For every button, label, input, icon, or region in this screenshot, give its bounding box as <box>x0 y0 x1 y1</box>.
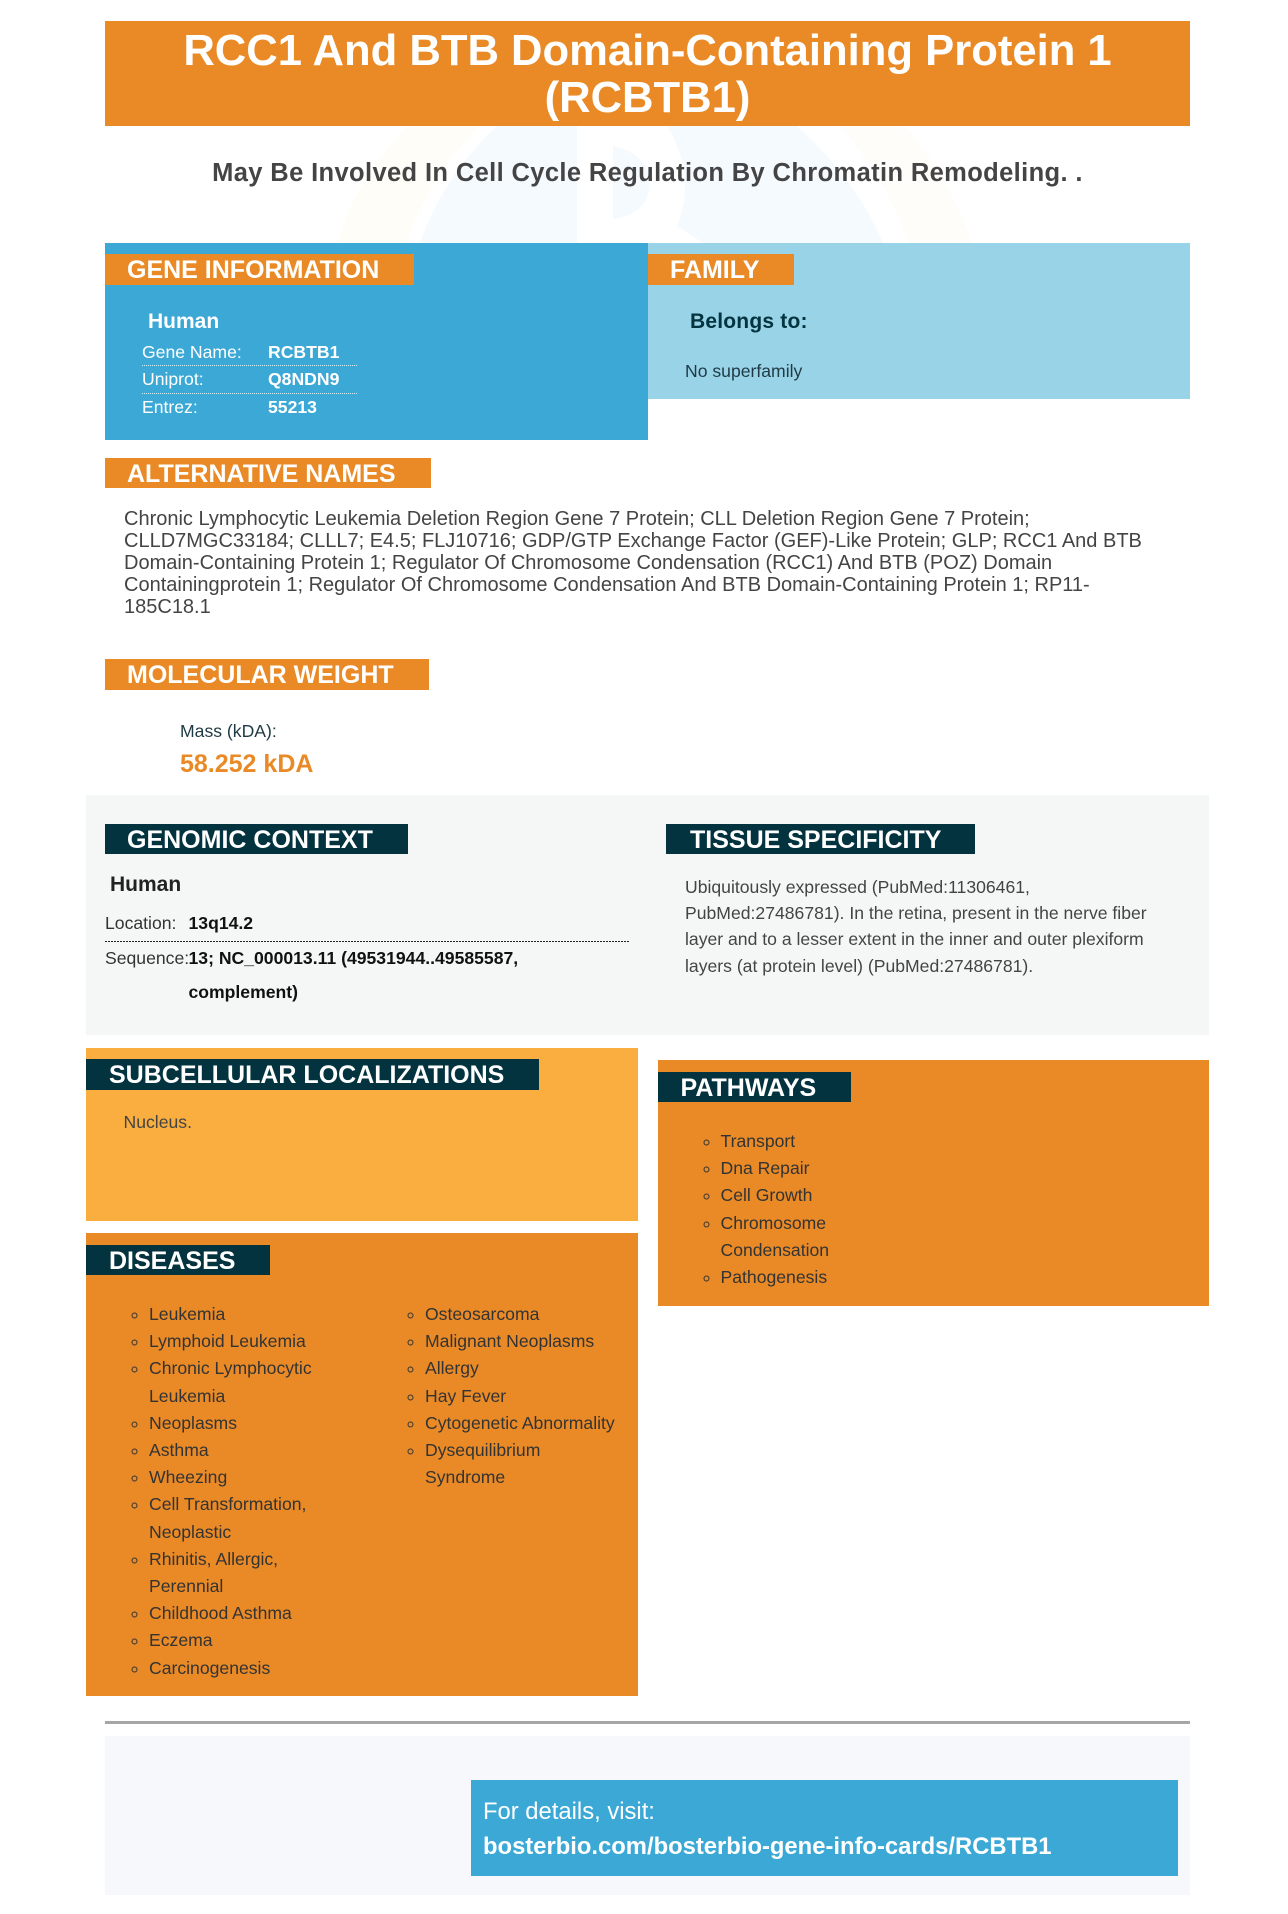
gene name row: RCBTB1 <box>268 342 339 362</box>
entrez row <box>142 397 317 417</box>
diseases list: column two: Hay Fever <box>425 1386 506 1406</box>
diseases list: column one: Cell Transformation, <box>149 1494 306 1514</box>
diseases list: column two: Syndrome <box>425 1467 505 1487</box>
pathways list: Cell Growth <box>720 1185 812 1205</box>
gene name row <box>142 342 339 362</box>
location row: Location: <box>105 913 176 933</box>
panel: gene information <box>105 243 648 440</box>
diseases list: column one: Asthma <box>149 1440 209 1460</box>
diseases list: column one: Childhood Asthma <box>149 1603 292 1623</box>
sequence row: Sequence: <box>105 948 189 968</box>
pathways list: Condensation <box>720 1240 829 1260</box>
panel: subcellular localizations <box>86 1048 638 1221</box>
diseases list: column one: Lymphoid Leukemia <box>149 1331 306 1351</box>
panel: genomic context and tissue specificity <box>86 795 1209 1035</box>
diseases list: column one: Carcinogenesis <box>149 1658 270 1678</box>
diseases list: column one: Neoplasms <box>149 1413 237 1433</box>
diseases list: column one: Leukemia <box>149 1386 225 1406</box>
heading: diseases: DISEASES <box>109 1247 235 1275</box>
diseases list: column one: Leukemia <box>149 1304 225 1324</box>
sequence row: 13; NC_000013.11 (49531944..49585587, <box>188 948 518 968</box>
localization text: Nucleus. <box>124 1112 192 1132</box>
pathways list: Pathogenesis <box>720 1267 827 1287</box>
diseases list: column one: Neoplastic <box>149 1522 231 1542</box>
pathways list <box>704 1131 829 1287</box>
tissue specificity text: layer and to a lesser extent in the inner and outer plexiform <box>685 929 1144 949</box>
family value: No superfamily <box>685 361 802 381</box>
alternative names text: Domain-Containing Protein 1; Regulator Of Chromosome Condensation (RCC1) And BTB (POZ) Domain <box>124 552 1052 574</box>
title banner: (RCBTB1) <box>545 74 750 122</box>
heading: family: FAMILY <box>670 256 759 284</box>
call to action box: bosterbio.com/bosterbio-gene-info-cards/RCBTB1 <box>483 1833 1052 1860</box>
diseases list: column two: Allergy <box>425 1358 479 1378</box>
uniprot row: Q8NDN9 <box>268 369 339 389</box>
background watermark logo <box>420 126 882 243</box>
mass value: 58.252 kDA <box>180 750 313 778</box>
panel: diseases <box>86 1233 638 1696</box>
mass label: Mass (kDA): <box>180 721 277 741</box>
gene name row: Gene Name: <box>142 342 242 362</box>
alternative names text <box>124 508 1142 618</box>
pathways list: Chromosome <box>720 1213 826 1233</box>
heading: alternative names: ALTERNATIVE NAMES <box>127 460 396 488</box>
pathways list: Dna Repair <box>720 1158 810 1178</box>
heading: molecular weight: MOLECULAR WEIGHT <box>127 661 394 689</box>
title banner <box>105 21 1190 126</box>
entrez row: Entrez: <box>142 397 198 417</box>
diseases list: column two <box>408 1304 615 1487</box>
diseases list: column one: Chronic Lymphocytic <box>149 1358 312 1378</box>
title banner: RCC1 And BTB Domain-Containing Protein 1 <box>183 27 1112 75</box>
tissue specificity text <box>685 877 1147 976</box>
diseases list: column two: Cytogenetic Abnormality <box>425 1413 615 1433</box>
diseases list: column one: Eczema <box>149 1630 213 1650</box>
diseases list: column one: Rhinitis, Allergic, <box>149 1549 278 1569</box>
subtitle: May Be Involved In Cell Cycle Regulation By Chromatin Remodeling. . <box>212 159 1083 187</box>
diseases list: column two: Malignant Neoplasms <box>425 1331 594 1351</box>
entrez row: 55213 <box>268 397 317 417</box>
panel: family <box>648 243 1190 399</box>
heading: tissue specificity: TISSUE SPECIFICITY <box>690 826 941 854</box>
diseases list: column two: Osteosarcoma <box>425 1304 539 1324</box>
alternative names text: CLLD7MGC33184; CLLL7; E4.5; FLJ10716; GDP/GTP Exchange Factor (GEF)-Like Protein; GLP; RCC1 And BTB <box>124 530 1142 552</box>
alternative names text: 185C18.1 <box>124 596 211 618</box>
heading: genomic context: GENOMIC CONTEXT <box>127 826 373 854</box>
sequence row: complement) <box>188 982 298 1002</box>
heading: gene information: GENE INFORMATION <box>127 256 379 284</box>
pathways list: Transport <box>720 1131 795 1151</box>
heading: pathways: PATHWAYS <box>680 1074 816 1102</box>
call to action box: For details, visit: <box>483 1798 655 1825</box>
uniprot row <box>142 369 339 389</box>
belongs to label: Belongs to: <box>690 310 808 333</box>
panel: genomic context and tissue specificity: 13q14.2 <box>188 913 253 933</box>
tissue specificity text: Ubiquitously expressed (PubMed:11306461, <box>685 877 1030 897</box>
footer panel <box>105 1736 1190 1895</box>
diseases list: column two: Dysequilibrium <box>425 1440 540 1460</box>
location row <box>105 913 253 933</box>
heading: diseases <box>86 1245 270 1275</box>
species label: Human <box>110 873 181 896</box>
alternative names text: Chronic Lymphocytic Leukemia Deletion Region Gene 7 Protein; CLL Deletion Region Gene 7 Protein; <box>124 508 1030 530</box>
sequence row <box>105 948 518 1002</box>
diseases list: column one: Wheezing <box>149 1467 227 1487</box>
tissue specificity text: layers (at protein level) (PubMed:27486781). <box>685 956 1033 976</box>
uniprot row: Uniprot: <box>142 369 204 389</box>
diseases list: column one: Perennial <box>149 1576 223 1596</box>
tissue specificity text: PubMed:27486781). In the retina, present in the nerve fiber <box>685 903 1147 923</box>
alternative names text: Containingprotein 1; Regulator Of Chromosome Condensation And BTB Domain-Containing Protein 1; RP11- <box>124 574 1090 596</box>
diseases list: column one <box>132 1304 312 1678</box>
heading: subcellular localizations: SUBCELLULAR LOCALIZATIONS <box>109 1061 504 1089</box>
call to action box <box>471 1780 1178 1876</box>
species label: Human <box>148 310 219 333</box>
heading: family <box>648 254 794 285</box>
heading: pathways <box>658 1072 851 1102</box>
panel: pathways <box>658 1060 1209 1306</box>
